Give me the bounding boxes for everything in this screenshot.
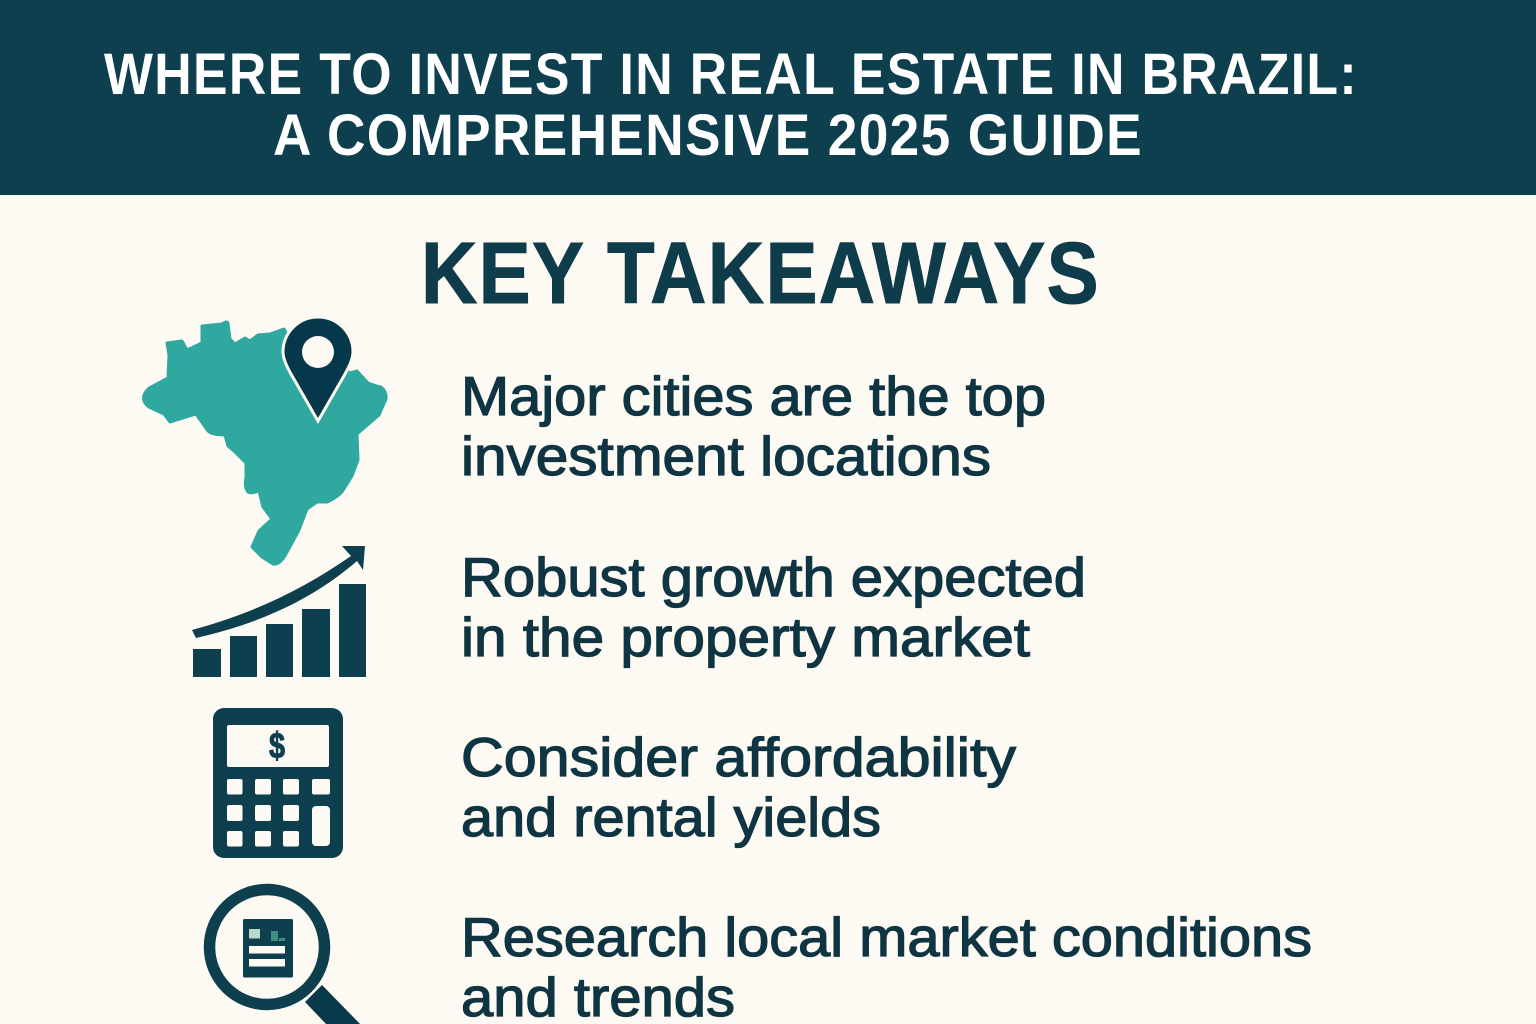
text: major cities: investment locations bbox=[461, 425, 991, 487]
location pin bbox=[283, 317, 353, 421]
text: robust growth bbox=[461, 546, 1086, 668]
heading: key takeaways: KEY TAKEAWAYS bbox=[421, 225, 1100, 322]
icon: growth bar chart with arrow bbox=[192, 546, 366, 677]
text: affordability: and rental yields bbox=[461, 786, 881, 848]
header banner bbox=[0, 0, 1536, 195]
text: robust growth: Robust growth expected bbox=[461, 546, 1086, 608]
text: research: Research local market conditions bbox=[461, 906, 1312, 968]
document bbox=[243, 919, 293, 978]
text: robust growth: in the property market bbox=[461, 606, 1030, 668]
map of Brazil bbox=[144, 322, 386, 564]
text: affordability: Consider affordability bbox=[461, 726, 1017, 788]
title bbox=[104, 42, 1358, 168]
icon: calculator bbox=[213, 708, 343, 858]
text: major cities: Major cities are the top bbox=[461, 365, 1046, 427]
title: A COMPREHENSIVE 2025 GUIDE bbox=[273, 103, 1143, 168]
title: WHERE TO INVEST IN REAL ESTATE IN BRAZIL: bbox=[104, 42, 1358, 107]
icon: Brazil map with location pin bbox=[144, 317, 386, 564]
dollar sign: $ bbox=[269, 725, 285, 766]
text: affordability bbox=[461, 726, 1017, 848]
icon: magnifying glass over document bbox=[210, 890, 362, 1024]
text: major cities bbox=[461, 365, 1046, 487]
text: research bbox=[461, 906, 1312, 1024]
